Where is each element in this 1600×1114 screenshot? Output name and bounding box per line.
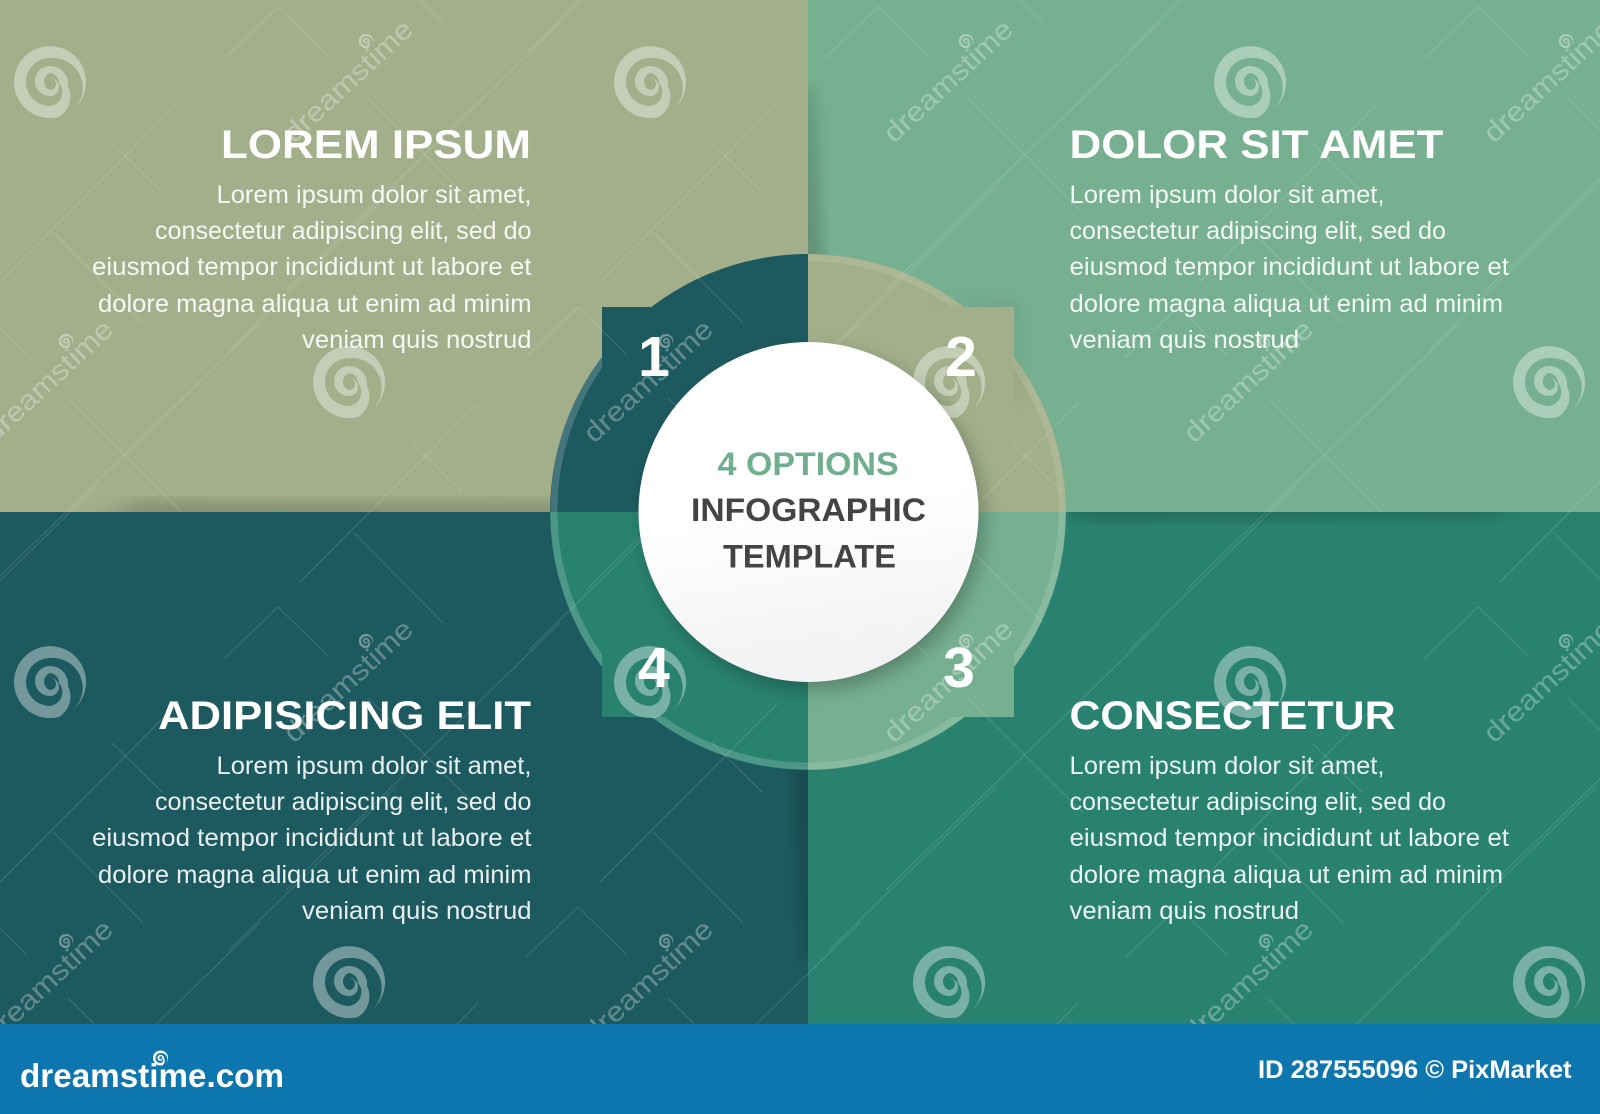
text block: lorem ipsum: veniam quis nostrud bbox=[302, 326, 532, 354]
text block: lorem ipsum: LOREM IPSUM bbox=[221, 123, 531, 167]
text block: adipisicing elit: dolore magna aliqua ut enim ad minim bbox=[98, 861, 532, 889]
panel: adipisicing elit background bbox=[0, 512, 816, 1024]
text block: dolor sit amet: veniam quis nostrud bbox=[1070, 326, 1299, 354]
watermark overlay: dreamstime bbox=[1177, 313, 1319, 449]
text block: lorem ipsum: dolore magna aliqua ut enim ad minim bbox=[98, 290, 532, 318]
text block: adipisicing elit: Lorem ipsum dolor sit amet, bbox=[216, 752, 532, 780]
panel: consectetur background bbox=[808, 504, 1600, 1024]
footer credit: ID 287555096 © PixMarket bbox=[1258, 1056, 1572, 1084]
text block: consectetur: Lorem ipsum dolor sit amet, bbox=[1070, 752, 1384, 780]
watermark overlay: dreamstime bbox=[577, 913, 719, 1049]
panel: lorem ipsum background bbox=[0, 0, 808, 522]
center disc shadow bbox=[644, 350, 984, 690]
number 1: 1 bbox=[638, 325, 670, 389]
panel: dolor sit amet background bbox=[800, 0, 1600, 512]
segment 1 bbox=[550, 254, 808, 512]
watermark overlay: dreamstime bbox=[877, 13, 1019, 149]
text block: dolor sit amet: dolore magna aliqua ut enim ad minim bbox=[1070, 290, 1503, 318]
text block: consectetur: consectetur adipiscing elit, sed do bbox=[1070, 788, 1446, 816]
text block: adipisicing elit: ADIPISICING ELIT bbox=[158, 694, 531, 738]
footer logo icon bbox=[153, 1050, 168, 1066]
text block: dolor sit amet: consectetur adipiscing elit, sed do bbox=[1070, 217, 1446, 245]
footer logo: dreamstime.com bbox=[20, 1057, 284, 1094]
text block: dolor sit amet bbox=[1070, 123, 1509, 354]
watermark overlay: dreamstime bbox=[1177, 913, 1319, 1049]
watermark overlay: dreamstime bbox=[877, 613, 1019, 749]
number 4: 4 bbox=[638, 636, 670, 700]
text block: consectetur: dolore magna aliqua ut enim ad minim bbox=[1070, 861, 1503, 889]
text block: dolor sit amet: eiusmod tempor incididunt ut labore et bbox=[1070, 253, 1509, 281]
center title: INFOGRAPHIC bbox=[691, 492, 926, 528]
segment 2 bbox=[808, 254, 1066, 512]
center title: 4 OPTIONS bbox=[718, 446, 899, 482]
text block: lorem ipsum: eiusmod tempor incididunt ut labore et bbox=[92, 253, 532, 281]
center title: TEMPLATE bbox=[723, 538, 896, 574]
text block: dolor sit amet: DOLOR SIT AMET bbox=[1070, 123, 1444, 167]
text block: consectetur: eiusmod tempor incididunt ut labore et bbox=[1070, 824, 1509, 852]
text block: consectetur: veniam quis nostrud bbox=[1070, 897, 1299, 925]
segment 4 bbox=[550, 512, 808, 770]
text block: lorem ipsum bbox=[92, 123, 532, 354]
text block: lorem ipsum: Lorem ipsum dolor sit amet, bbox=[216, 181, 532, 209]
text block: consectetur: CONSECTETUR bbox=[1070, 694, 1396, 738]
footer bar bbox=[0, 1024, 1600, 1114]
watermark overlay: dreamstime bbox=[277, 13, 419, 149]
number 3: 3 bbox=[943, 636, 975, 700]
text block: adipisicing elit: veniam quis nostrud bbox=[302, 897, 532, 925]
text block: consectetur bbox=[1070, 694, 1509, 925]
text block: dolor sit amet: Lorem ipsum dolor sit amet, bbox=[1070, 181, 1384, 209]
watermark overlay: dreamstime bbox=[577, 313, 719, 449]
text block: adipisicing elit: eiusmod tempor incididunt ut labore et bbox=[92, 824, 532, 852]
text block: adipisicing elit bbox=[92, 694, 532, 925]
watermark overlay: dreamstime bbox=[277, 613, 419, 749]
center disc bbox=[638, 342, 978, 682]
text block: adipisicing elit: consectetur adipiscing elit, sed do bbox=[155, 788, 532, 816]
number 2: 2 bbox=[945, 325, 977, 389]
center title bbox=[691, 446, 926, 574]
circle diagram bbox=[550, 254, 1066, 770]
text block: lorem ipsum: consectetur adipiscing elit, sed do bbox=[155, 217, 532, 245]
segment 3 bbox=[808, 512, 1066, 770]
